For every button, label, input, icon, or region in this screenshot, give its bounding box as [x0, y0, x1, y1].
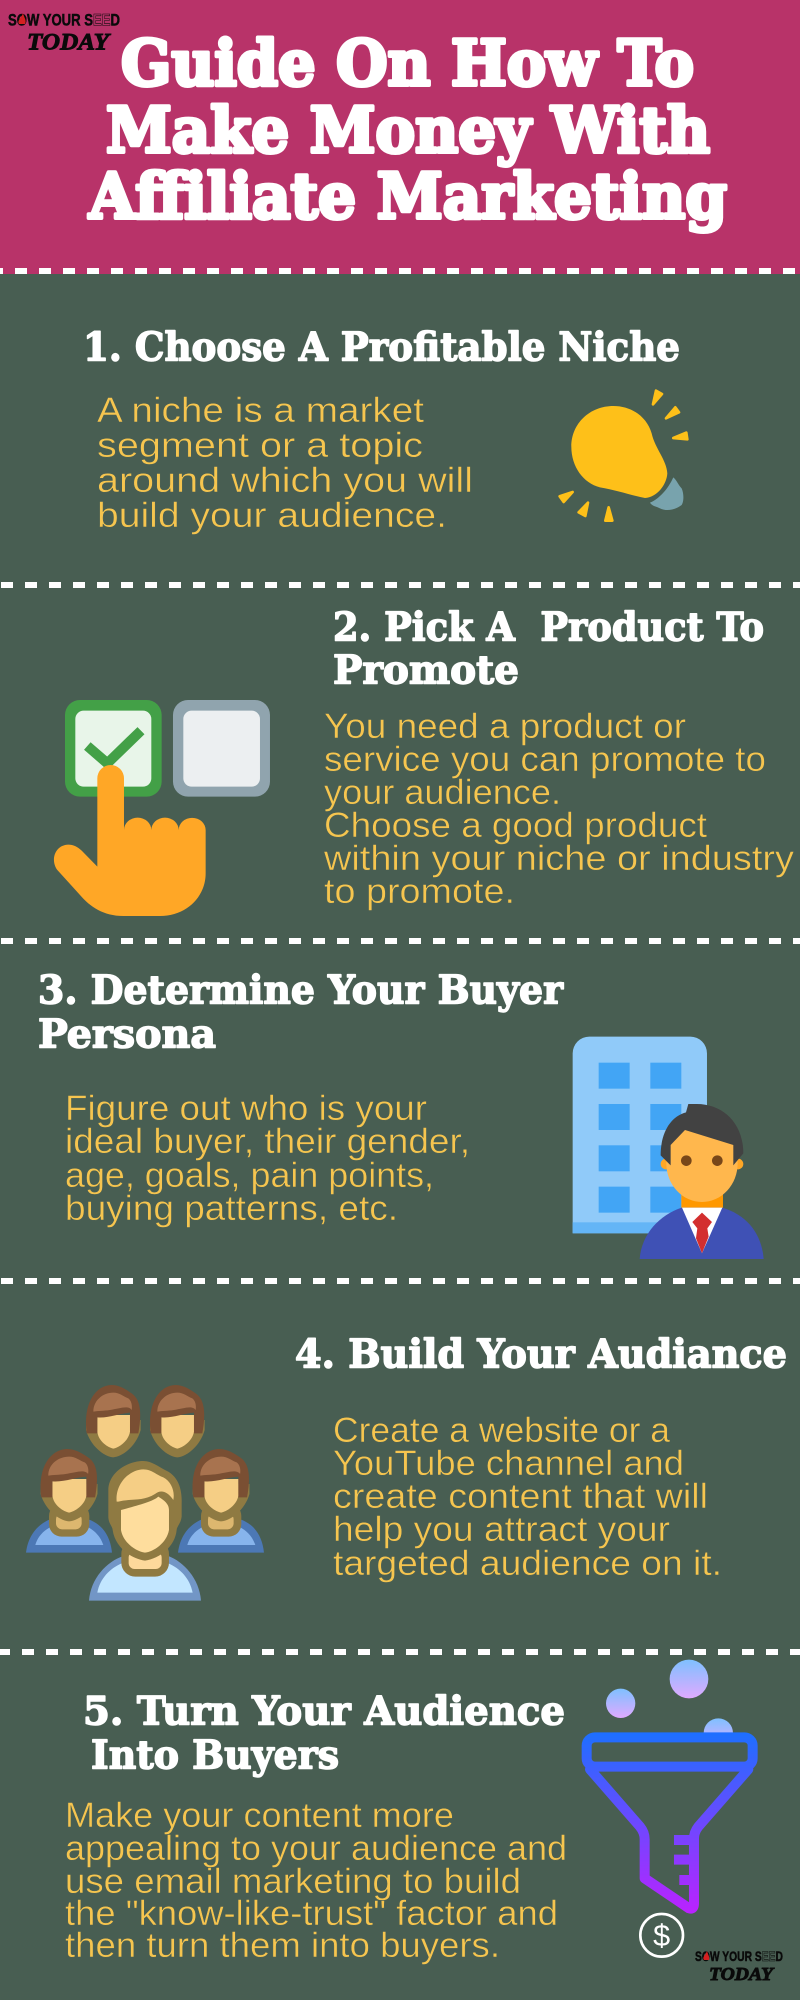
text: step 4: Create a website or a [333, 1411, 671, 1450]
text: step 3: Figure out who is your [65, 1089, 427, 1128]
text: step 5: then turn them into buyers. [65, 1926, 500, 1965]
heading: step 2: Promote [333, 648, 519, 694]
text: step 1 [97, 391, 473, 535]
text: step 5: appealing to your audience and [65, 1829, 567, 1868]
logo: Sow Your Seed Today [8, 12, 120, 54]
text: step 1: segment or a topic [97, 426, 423, 465]
text: step 5 [65, 1796, 567, 1965]
text: step 4: targeted audience on it. [333, 1544, 722, 1583]
logo: footer: TODAY [709, 1964, 775, 1984]
text: step 3: ideal buyer, their gender, [65, 1122, 470, 1161]
text: step 1: A niche is a market [97, 391, 424, 430]
icon: dollar coin [640, 1914, 683, 1957]
text: step 5: use email marketing to build [65, 1862, 521, 1901]
text: step 2: to promote. [324, 872, 515, 911]
icon: dollar coin: $ [653, 1919, 670, 1953]
heading: step 3: Persona [38, 1012, 216, 1058]
title [88, 26, 727, 233]
heading: step 3: 3. Determine Your Buyer [38, 968, 563, 1014]
text: step 2: your audience. [324, 773, 561, 812]
text: step 3 [65, 1089, 470, 1228]
logo: Sow Your Seed Today: TODAY [27, 30, 111, 54]
panel: step 3 [38, 968, 764, 1259]
text: step 3: buying patterns, etc. [65, 1189, 398, 1228]
heading: step 1: 1. Choose A Profitable Niche [83, 324, 680, 370]
panel: step 1 [83, 324, 687, 535]
heading: step 5: Into Buyers [91, 1732, 339, 1778]
text: step 4: help you attract your [333, 1510, 670, 1549]
title: Make Money With [106, 93, 710, 167]
text: step 1: build your audience. [97, 496, 447, 535]
text: step 4: YouTube channel and [333, 1444, 684, 1483]
panel: step 2 [54, 604, 795, 916]
icon: audience group [26, 1385, 264, 1601]
text: step 2: You need a product or [324, 707, 686, 746]
icon: sales funnel [587, 1660, 753, 1957]
heading: step 4: 4. Build Your Audiance [295, 1332, 787, 1378]
title: Affiliate Marketing [88, 159, 727, 233]
icon: light bulb [560, 391, 687, 521]
text: step 2: within your niche or industry [323, 839, 795, 878]
icon: businessman and building [573, 1037, 764, 1259]
heading: step 3 [38, 968, 563, 1058]
text: step 2: Choose a good product [324, 806, 707, 845]
text: step 3: age, goals, pain points, [65, 1156, 434, 1195]
heading: step 5: 5. Turn Your Audience [83, 1688, 565, 1734]
logo: footer: SOW YOUR SEED [695, 1948, 783, 1964]
panel: step 5 [65, 1660, 783, 1984]
text: step 5: the "know-like-trust" factor and [65, 1894, 558, 1933]
panel: step 4 [26, 1332, 787, 1601]
logo: Sow Your Seed Today: SOW YOUR SEED [8, 12, 120, 30]
heading: step 5 [83, 1688, 565, 1778]
header panel [0, 0, 800, 274]
text: step 1: around which you will [97, 461, 473, 500]
icon: hand pressing checkbox [54, 700, 270, 916]
text: step 4 [333, 1411, 722, 1583]
text: step 5: Make your content more [65, 1796, 454, 1835]
text: step 2 [323, 707, 795, 911]
heading: step 2: 2. Pick A Product To [333, 604, 764, 650]
logo: footer [695, 1948, 783, 1984]
text: step 4: create content that will [333, 1477, 708, 1516]
text: step 2: service you can promote to [324, 740, 766, 779]
heading: step 2 [333, 604, 764, 694]
title: Guide On How To [121, 26, 694, 100]
